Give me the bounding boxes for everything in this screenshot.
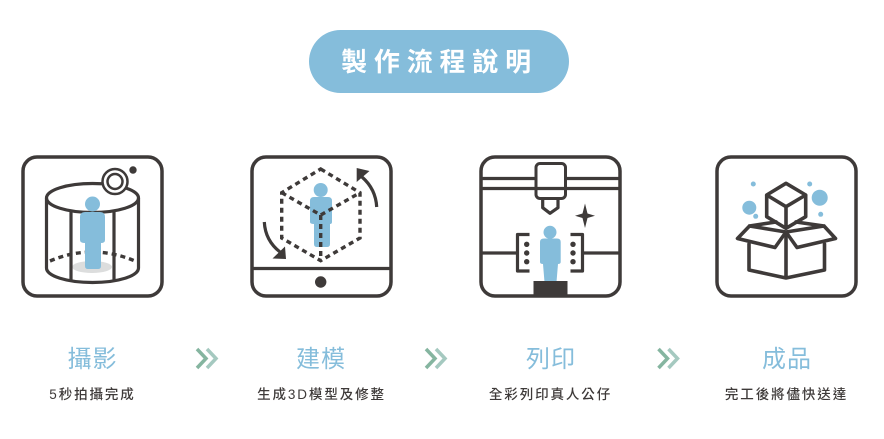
step 4 labels: 成品 [762,346,812,373]
arrow 1 [197,349,216,368]
title pill [309,30,569,93]
step 4 labels: 完工後將儘快送達 [725,386,848,402]
title pill: 製作流程說明 [341,47,538,77]
panel: finished product icon [717,157,856,296]
panel: scanning icon [23,157,162,296]
step 3 labels [489,346,612,402]
step 1 labels: 5秒拍攝完成 [49,386,136,402]
step 4 labels [725,346,848,402]
arrow 2 [426,349,445,368]
step 2 labels: 生成3D模型及修整 [257,386,386,402]
panel: printing icon [481,157,620,296]
step 2 labels: 建模 [296,346,346,373]
step 1 labels [49,346,136,402]
arrow 3 [658,349,678,368]
step 3 labels: 全彩列印真人公仔 [489,386,612,402]
step 2 labels [257,346,386,402]
step 3 labels: 列印 [526,346,576,373]
panel: modeling icon [252,157,391,296]
step 1 labels: 攝影 [68,346,118,373]
